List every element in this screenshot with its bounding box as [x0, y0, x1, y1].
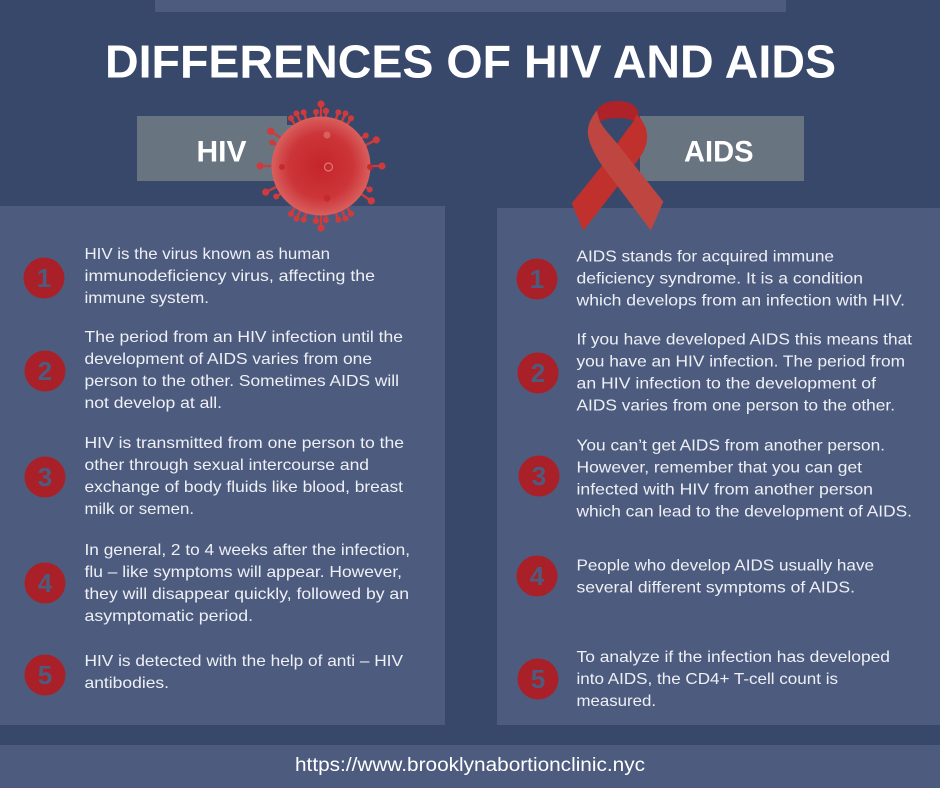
point 5: antibodies.: [84, 675, 169, 692]
point 4: they will disappear quickly, followed by an: [84, 586, 409, 603]
point 2: AIDS varies from one person to the other.: [576, 398, 895, 414]
point 4: asymptomatic period.: [84, 608, 253, 625]
point 3: HIV is transmitted from one person to the: [84, 435, 404, 452]
point 3: 3: [532, 461, 546, 491]
point 5: To analyze if the infection has developed: [576, 649, 890, 666]
footer URL: https://www.brooklynabortionclinic.nyc: [295, 755, 645, 776]
footer bar: [0, 745, 940, 788]
point 1: immunodeficiency virus, affecting the: [84, 268, 375, 285]
label: AIDS: [640, 116, 804, 181]
point 5: 5: [531, 664, 545, 694]
point 1: 1: [530, 264, 544, 294]
point 5: measured.: [576, 693, 656, 710]
point 1: [24, 246, 375, 307]
point 2: 2: [531, 358, 545, 388]
point 1: immune system.: [84, 290, 209, 307]
label: HIV: HIV: [196, 136, 246, 168]
point 3: milk or semen.: [84, 501, 194, 518]
point 4: In general, 2 to 4 weeks after the infection,: [84, 542, 410, 559]
point 2: The period from an HIV infection until the: [84, 329, 403, 346]
point 2: If you have developed AIDS this means that: [576, 332, 913, 348]
point 4: People who develop AIDS usually have: [576, 558, 874, 574]
point 2: development of AIDS varies from one: [84, 351, 372, 368]
panel: HIV: [0, 206, 445, 725]
point 5: [24, 653, 403, 696]
point 4: several different symptoms of AIDS.: [576, 580, 855, 596]
label: HIV: [137, 116, 297, 181]
point 4: 4: [38, 568, 53, 598]
point 2: [24, 329, 403, 412]
top bar: [155, 0, 786, 12]
point 1: 1: [37, 263, 51, 293]
point 1: [516, 248, 905, 310]
point 2: person to the other. Sometimes AIDS will: [84, 373, 399, 390]
point 4: flu – like symptoms will appear. However,: [84, 564, 402, 581]
point 2: you have an HIV infection. The period from: [576, 354, 905, 370]
point 4: [516, 556, 874, 596]
point 3: [518, 438, 912, 520]
point 3: exchange of body fluids like blood, breast: [84, 479, 404, 496]
point 1: HIV is the virus known as human: [84, 246, 330, 263]
point 3: However, remember that you can get: [576, 460, 863, 476]
point 3: 3: [38, 462, 52, 492]
point 5: into AIDS, the CD4+ T-cell count is: [576, 671, 838, 688]
point 3: which can lead to the development of AIDS.: [575, 504, 912, 520]
point 3: infected with HIV from another person: [576, 482, 873, 498]
panel: AIDS: [497, 208, 940, 725]
point 2: [518, 332, 913, 414]
point 1: deficiency syndrome. It is a condition: [576, 270, 863, 288]
point 5: [518, 649, 890, 710]
label: AIDS: AIDS: [684, 136, 754, 168]
point 3: other through sexual intercourse and: [84, 457, 369, 474]
point 5: 5: [38, 660, 52, 690]
point 2: 2: [38, 356, 52, 386]
icon: virus: [256, 100, 386, 232]
point 4: 4: [530, 561, 545, 591]
point 5: HIV is detected with the help of anti – HIV: [84, 653, 403, 670]
point 4: [24, 542, 410, 625]
point 3: You can’t get AIDS from another person.: [576, 438, 885, 454]
point 2: an HIV infection to the development of: [576, 376, 877, 392]
point 2: not develop at all.: [84, 395, 222, 412]
point 1: which develops from an infection with HIV.: [575, 292, 905, 310]
point 3: [24, 435, 404, 518]
icon: red ribbon: [572, 101, 663, 231]
title: DIFFERENCES OF HIV AND AIDS: [105, 36, 836, 88]
point 1: AIDS stands for acquired immune: [576, 248, 834, 266]
